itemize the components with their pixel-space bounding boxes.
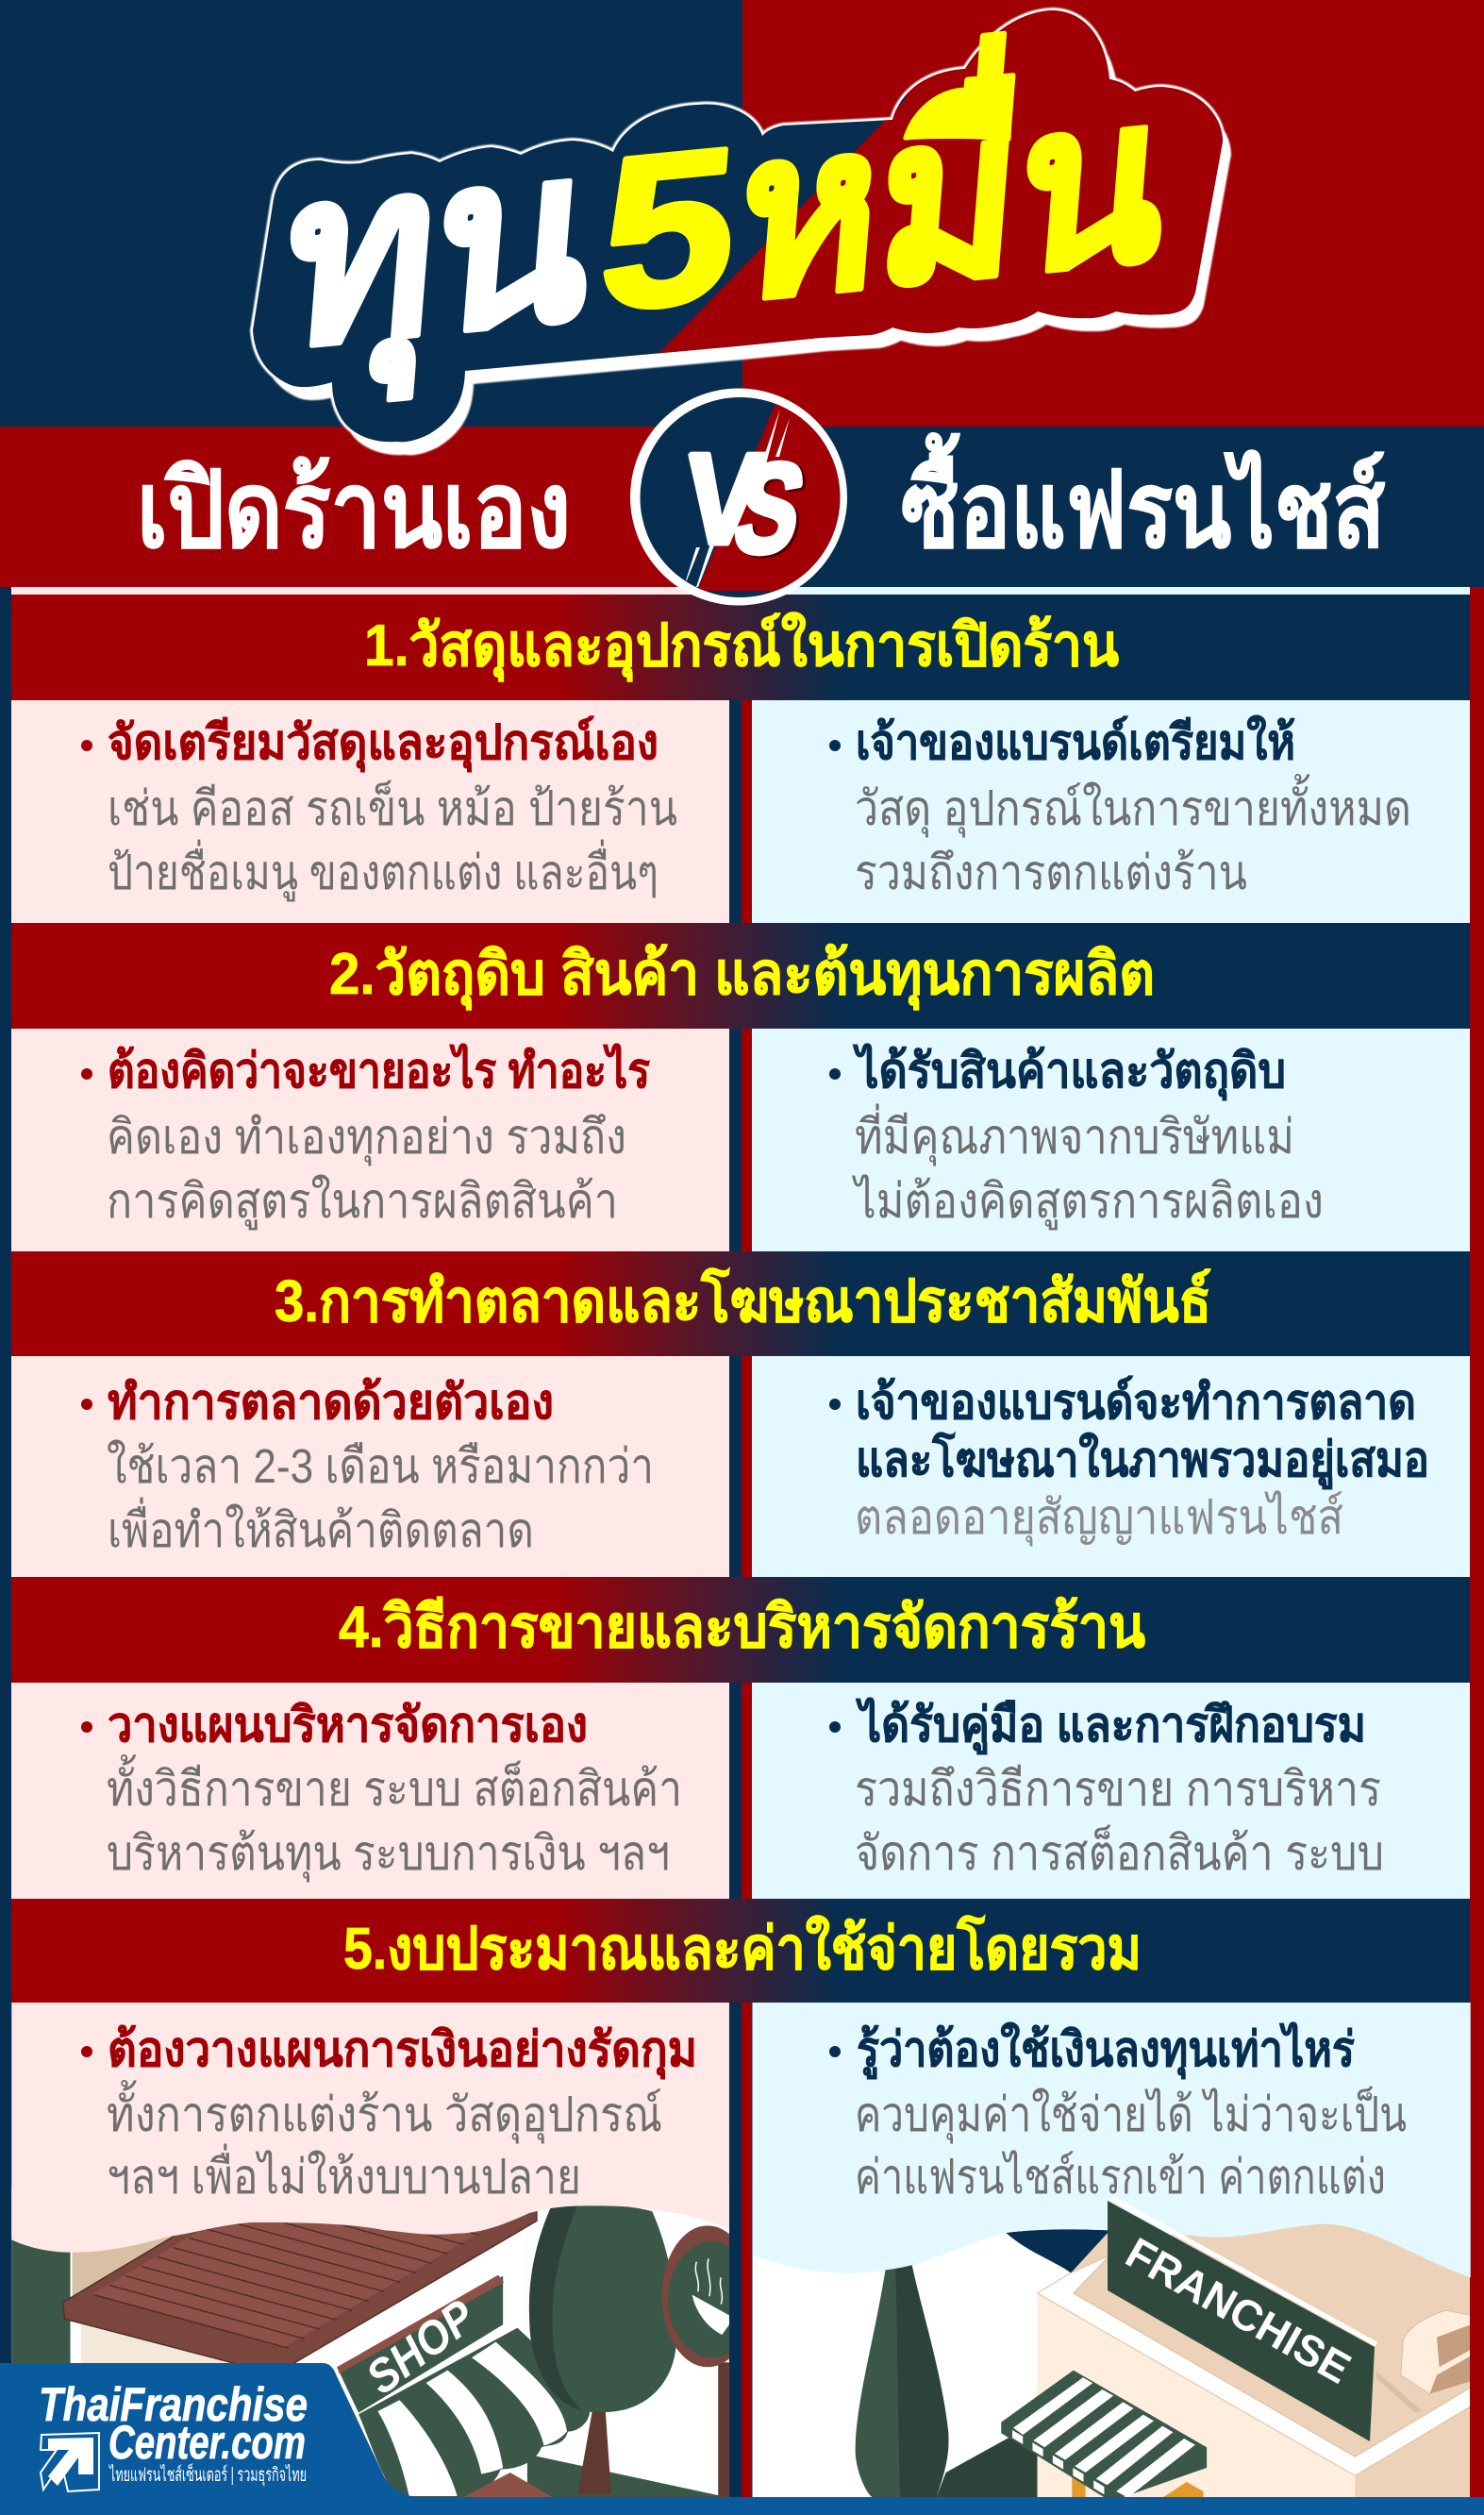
illustration: franchise store	[753, 2223, 1470, 2497]
section 3 right panel	[752, 1356, 1470, 1577]
section 5 left panel: ทั้งการตกแต่งร้าน วัสดุอุปกรณ์	[107, 2080, 662, 2144]
VS badge: S	[726, 438, 819, 581]
franchise sign: FRANCHISE	[1118, 2227, 1359, 2393]
title: ทุน 5 หมื่น: หมื่น	[730, 17, 1177, 346]
VS badge: S	[724, 436, 816, 579]
section 4 left panel: บริหารต้นทุน ระบบการเงิน ฯลฯ	[107, 1826, 670, 1883]
section 3 header	[11, 1251, 1470, 1356]
section 5 header: 5.งบประมาณและค่าใช้จ่ายโดยรวม	[343, 1914, 1142, 1982]
section 3 left panel: ทำการตลาดด้วยตัวเอง	[108, 1375, 554, 1429]
section 2 left panel: ต้องคิดว่าจะขายอะไร ทำอะไร	[108, 1043, 651, 1098]
logo: ThaiFranchise Center.com: ไทยแฟรนไชส์เซ็นเตอร์ | รวมธุรกิจไทย	[108, 2462, 307, 2487]
footer bar	[0, 2497, 1484, 2515]
section 4 right panel: ได้รับคู่มือ และการฝึกอบรม	[855, 1697, 1366, 1755]
section 1 header	[11, 595, 1470, 700]
wall	[298, 2230, 527, 2498]
building	[1038, 2293, 1355, 2498]
title: ทุน 5 หมื่น	[249, 6, 1232, 457]
logo: ThaiFranchise Center.com: ThaiFranchise	[39, 2378, 308, 2431]
rooftop unit	[1376, 2372, 1423, 2413]
logo: ThaiFranchise Center.com	[0, 2363, 419, 2497]
section 2 right panel: ที่มีคุณภาพจากบริษัทแม่	[855, 1104, 1294, 1166]
logo: ThaiFranchise Center.com: Center.com	[108, 2416, 306, 2469]
section 2 header	[11, 923, 1470, 1029]
SHOP sign text: SHOP	[357, 2289, 485, 2405]
section 5 right panel: รู้ว่าต้องใช้เงินลงทุนเท่าไหร่	[857, 2021, 1356, 2080]
section 3 right panel: และโฆษณาในภาพรวมอยู่เสมอ	[856, 1431, 1429, 1490]
title: ทุน 5 หมื่น: ทุน	[275, 100, 600, 411]
franchise sign	[1108, 2198, 1376, 2441]
hill	[1072, 2223, 1470, 2456]
section 3 right panel: ตลอดอายุสัญญาแฟรนไชส์	[855, 1490, 1343, 1547]
section 2 right panel	[752, 1029, 1470, 1251]
section 4 right panel: รวมถึงวิธีการขาย การบริหาร	[855, 1762, 1381, 1816]
section 4 left panel: ทั้งวิธีการขาย ระบบ สต็อกสินค้า	[107, 1754, 682, 1816]
title: ทุน 5 หมื่น: 5	[592, 100, 745, 357]
roof	[62, 2210, 538, 2363]
top banner background	[0, 0, 1484, 595]
section 1 right panel: รวมถึงการตกแต่งร้าน	[855, 846, 1247, 899]
section 1 left panel: จัดเตรียมวัสดุและอุปกรณ์เอง	[108, 715, 659, 773]
section 2 left panel: การคิดสูตรในการผลิตสินค้า	[107, 1174, 618, 1231]
illustration: shop	[11, 2186, 729, 2497]
section 1 left panel: เช่น คีออส รถเข็น หม้อ ป้ายร้าน	[108, 780, 677, 835]
section 2 header: 2.วัตถุดิบ สินค้า และต้นทุนการผลิต	[329, 942, 1155, 1010]
section 5 left panel: ต้องวางแผนการเงินอย่างรัดกุม	[108, 2022, 697, 2080]
door frame	[1072, 2475, 1086, 2498]
section 2 right panel: ได้รับสินค้าและวัตถุดิบ	[852, 1043, 1286, 1101]
section 1 right panel	[752, 700, 1470, 923]
VS badge: V	[678, 427, 769, 570]
section 3 header: 3.การทำตลาดและโฆษณาประชาสัมพันธ์	[275, 1266, 1211, 1334]
section 1 left panel: ป้ายชื่อเมนู ของตกแต่ง และอื่นๆ	[108, 840, 659, 902]
section 2 left panel	[11, 1029, 729, 1251]
section 4 header: 4.วิธีการขายและบริหารจัดการร้าน	[339, 1595, 1145, 1660]
section 4 right panel: จัดการ การสต็อกสินค้า ระบบ	[855, 1825, 1384, 1880]
section 1 header: 1.วัสดุและอุปกรณ์ในการเปิดร้าน	[364, 612, 1119, 681]
awning	[358, 2328, 590, 2498]
section 1 right panel: วัสดุ อุปกรณ์ในการขายทั้งหมด	[855, 774, 1411, 838]
icon: arrow	[41, 2433, 99, 2491]
section 5 left panel: ฯลฯ เพื่อไม่ให้งบบานปลาย	[107, 2144, 581, 2204]
ground	[936, 2438, 1038, 2498]
section 5 right panel	[752, 2003, 1471, 2277]
center divider	[729, 700, 752, 2497]
section 2 left panel: คิดเอง ทำเองทุกอย่าง รวมถึง	[107, 1110, 626, 1166]
shop sign	[337, 2276, 503, 2413]
ground	[526, 2456, 719, 2497]
tree	[856, 2262, 948, 2498]
VS badge	[630, 389, 868, 606]
awning	[1001, 2371, 1207, 2498]
section 3 left panel: ใช้เวลา 2-3 เดือน หรือมากกว่า	[107, 1439, 654, 1493]
round cafe sign	[718, 2362, 729, 2498]
section 4 left panel: วางแผนบริหารจัดการเอง	[108, 1698, 588, 1752]
section 3 left panel	[11, 1356, 729, 1577]
section 4 right panel	[752, 1683, 1470, 1899]
section 4 header	[11, 1577, 1470, 1683]
section 3 left panel: เพื่อทำให้สินค้าติดตลาด	[108, 1498, 534, 1557]
section 1 left panel	[11, 700, 729, 923]
subtitle left: เปิดร้านเอง: เปิดร้านเอง	[137, 451, 571, 569]
subtitle right: ซื้อแฟรนไชส์: ซื้อแฟรนไชส์	[901, 432, 1386, 569]
section 4 left panel	[11, 1683, 729, 1899]
section 3 right panel: เจ้าของแบรนด์จะทำการตลาด	[856, 1375, 1416, 1429]
navy background	[1006, 2229, 1114, 2273]
section 5 left panel	[11, 2003, 729, 2253]
section 5 header	[11, 1899, 1470, 2003]
section 2 right panel: ไม่ต้องคิดสูตรการผลิตเอง	[851, 1174, 1324, 1231]
section 1 right panel: เจ้าของแบรนด์เตรียมให้	[856, 714, 1295, 769]
tree	[529, 2205, 676, 2412]
